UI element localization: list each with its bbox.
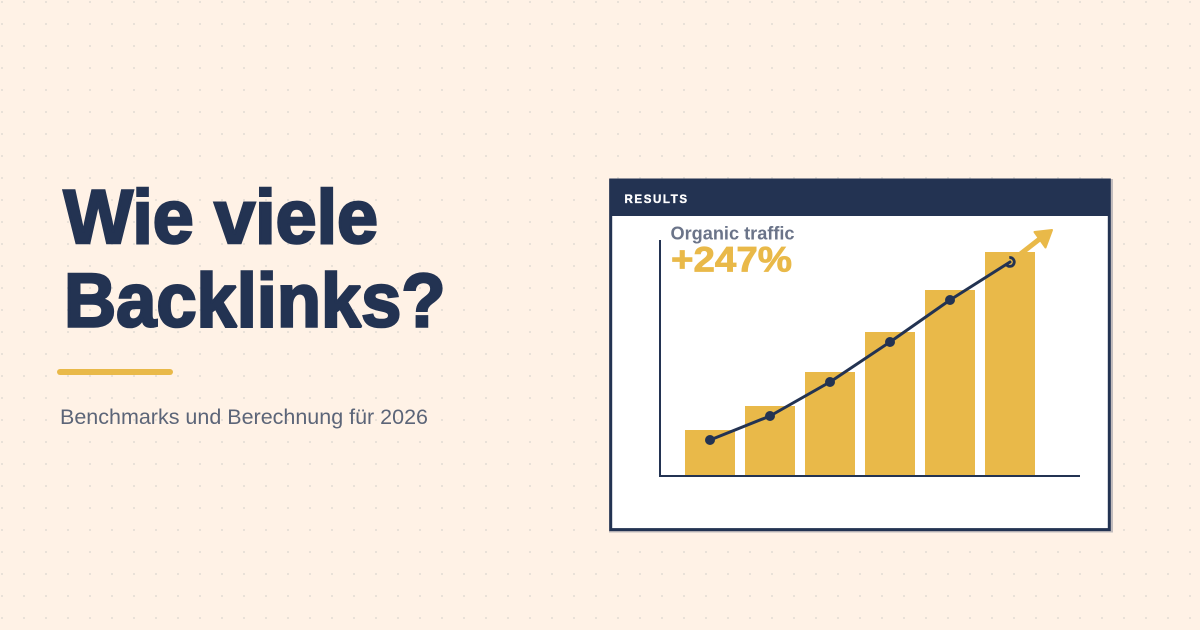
bar chart <box>659 230 1080 477</box>
axes <box>659 240 1080 477</box>
panel: results card <box>609 179 1113 532</box>
card header <box>610 180 1110 216</box>
arrow <box>1014 230 1052 259</box>
card header: RESULTS <box>624 194 687 206</box>
title: Backlinks? <box>64 258 446 344</box>
metric value: +247% <box>671 240 792 280</box>
card shadow <box>609 179 1113 532</box>
bars <box>685 252 1035 476</box>
subtitle: Benchmarks und Berechnung für 2026 <box>60 406 428 429</box>
title <box>64 175 446 344</box>
card body <box>611 180 1109 530</box>
title: Wie viele <box>64 175 378 260</box>
accent divider <box>57 369 173 375</box>
metric label: Organic traffic <box>670 224 794 244</box>
trend line with points <box>705 258 1014 445</box>
